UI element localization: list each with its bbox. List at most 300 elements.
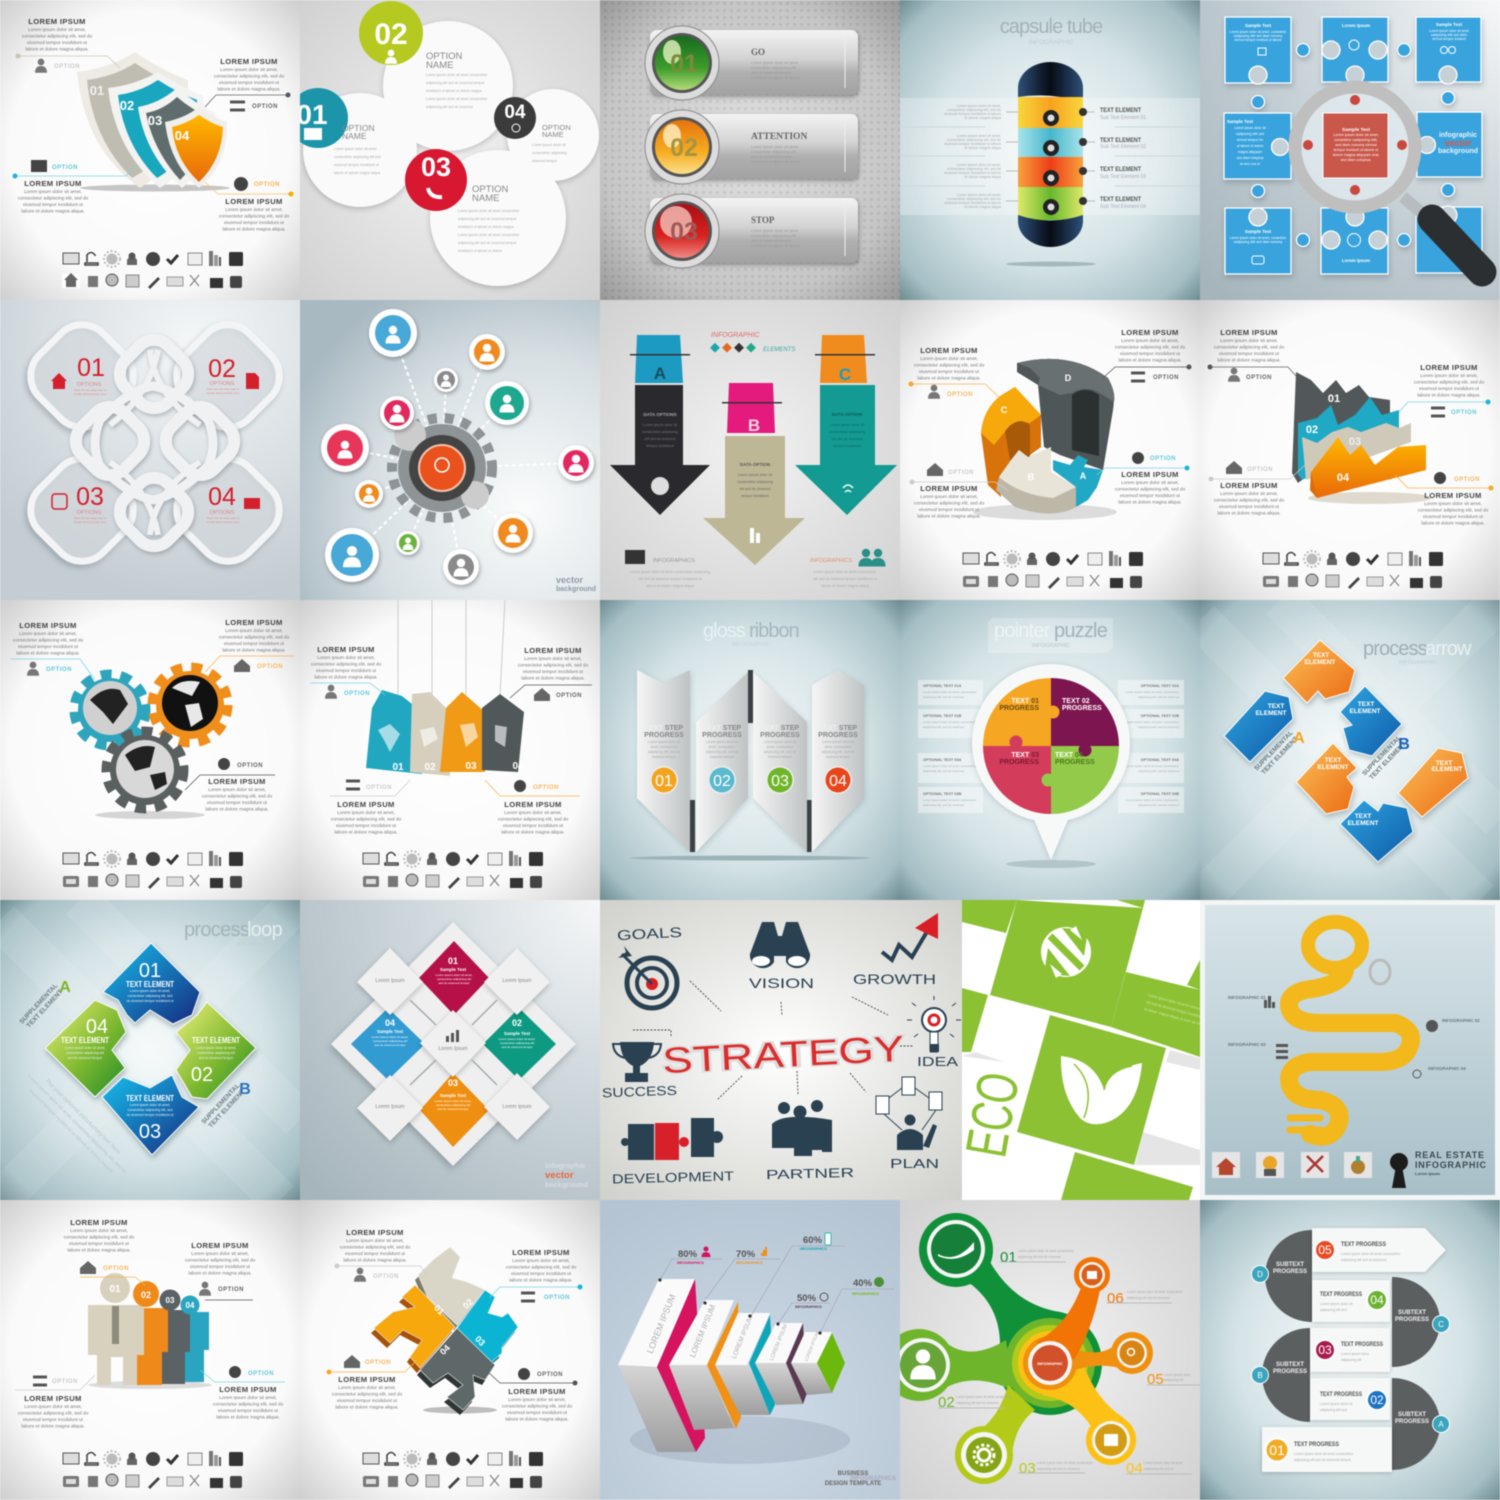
loop text: 03 xyxy=(139,1121,161,1143)
number badges: 03 xyxy=(1318,1343,1332,1357)
leader lines and percents: 80% xyxy=(678,1249,698,1260)
capsule labels: eiusmod tempor incididunt ut labore xyxy=(944,201,1001,205)
piece captions: Lorem ipsum dolor sit amet, consetetur xyxy=(1230,236,1287,240)
step paragraph: eiusmod tempor xyxy=(826,755,851,759)
step paragraph: adipiscing elit, sed do xyxy=(764,750,796,754)
option name labels: NAME xyxy=(342,131,367,141)
lorem text block 1: labore et dolore magna aliqua. xyxy=(1118,358,1182,362)
lorem text block 3: labore et dolore magna aliqua. xyxy=(205,806,269,812)
small white diamonds xyxy=(357,948,550,1141)
capsule labels: consectetur adipiscing elit, sed do xyxy=(947,138,1001,142)
panel: gloss ribbon xyxy=(599,599,901,901)
pointer xyxy=(972,664,1130,860)
supplemental labels: A xyxy=(1293,730,1305,747)
step paragraph: eiusmod tempor xyxy=(652,755,677,759)
lorem text block 2: labore et dolore magna aliqua. xyxy=(509,1278,573,1282)
arrow B: elit sed do eiusmod xyxy=(740,487,770,491)
piece captions: Sample Text xyxy=(1227,119,1254,124)
lorem text block 1: LOREM IPSUM xyxy=(19,621,77,630)
block captions: LOREM IPSUM xyxy=(731,1315,754,1360)
bar STOP xyxy=(645,194,858,268)
arrow A xyxy=(610,335,710,515)
piece numbers xyxy=(432,1297,487,1357)
supplemental labels: TEXT ELEMENT xyxy=(1368,741,1408,781)
piece captions: Lorem ipsum dolor sit amet, consetetur xyxy=(1230,30,1287,34)
block captions: LOREM IPSUM xyxy=(769,1323,789,1362)
development: DEVELOPMENT xyxy=(612,1168,734,1187)
side text bands: Lorem ipsum dolor sit amet, consectetur xyxy=(923,690,976,694)
body text xyxy=(1294,1252,1401,1462)
diamond labels: 04 xyxy=(385,1018,395,1028)
lorem text block 4: eiusmod tempor incididunt ut xyxy=(224,220,285,225)
subtext labels: SUBTEXT xyxy=(1398,1412,1426,1418)
lorem text block 4: consectetur adipiscing elit, sed do xyxy=(213,1402,284,1406)
diamond labels: 03 xyxy=(448,1078,458,1088)
body text: adipiscing elit sed do eiusmod tempor xyxy=(1294,1458,1352,1462)
numbers and captions: adipiscing elit sed do eiusmod xyxy=(956,1401,999,1405)
arrow C xyxy=(795,335,897,515)
title xyxy=(1363,638,1472,666)
lorem text block 4: Lorem ipsum dolor sit amet, xyxy=(1424,501,1482,506)
idea: IDEA xyxy=(917,1054,958,1069)
lorem text block 1: LOREM IPSUM xyxy=(70,1218,128,1227)
lorem text block 4: labore et dolore magna aliqua. xyxy=(216,1414,280,1420)
lorem text block 2: consectetur adipiscing elit, sed do xyxy=(518,662,589,668)
lorem text block 3 xyxy=(18,179,89,214)
paragraph text: Lorem ipsum dolor sit amet consectetur xyxy=(426,97,488,101)
text labels: TEXT PROGRESS xyxy=(1341,1342,1383,1348)
lorem text block 3: labore et dolore magna aliqua. xyxy=(335,1404,399,1410)
piece captions: Sample Text xyxy=(1436,22,1463,27)
leader lines and percents: 50% xyxy=(797,1293,817,1304)
arrow A: elit sed do eiusmod xyxy=(645,437,675,441)
lorem text block 2: labore et dolore magna aliqua. xyxy=(217,86,281,92)
step paragraph: Lorem ipsum dolor sit xyxy=(706,740,738,744)
capsule labels: TEXT ELEMENT xyxy=(1100,196,1141,203)
subtext labels xyxy=(1273,1262,1429,1425)
option labels: OPTION xyxy=(1247,467,1273,473)
arrow captions: TEXT xyxy=(1268,703,1284,710)
supplemental labels: SUPPLEMENTAL xyxy=(18,982,59,1026)
capsule labels: TEXT ELEMENT xyxy=(1100,166,1141,173)
lorem text block 4: consectetur adipiscing elit, sed do xyxy=(219,214,290,218)
paragraph text: Lorem ipsum dolor sit xyxy=(532,143,565,147)
tile paragraphs: Lorem ipsum dolor sit amet, xyxy=(130,1103,170,1107)
footer captions: elit sed do eiusmod tempor incididunt ut xyxy=(813,577,877,581)
lorem text block 3: eiusmod tempor incididunt ut xyxy=(337,1398,398,1403)
lorem text block 4: LOREM IPSUM xyxy=(225,197,283,206)
lorem text block 2: consectetur adipiscing elit, sed do xyxy=(914,362,985,368)
pie puzzle: TEXT 01 xyxy=(1011,698,1039,705)
leader lines and percents: 60% xyxy=(803,1235,823,1246)
lorem ipsum corners: Lorem Ipsum xyxy=(375,978,405,984)
footer captions: elit sed do eiusmod tempor incididunt ut xyxy=(638,577,702,581)
lorem text block 4: Lorem ipsum dolor sit amet, xyxy=(225,207,283,212)
lorem text block 3: Lorem ipsum dolor sit amet, xyxy=(24,189,82,194)
partner: PARTNER xyxy=(766,1165,854,1182)
option labels: OPTION xyxy=(1246,375,1272,381)
side text bands: OPTIONAL TEXT 03A xyxy=(923,758,962,762)
step paragraph: Lorem ipsum dolor sit xyxy=(822,740,854,744)
orange gear xyxy=(152,667,228,743)
numbered heads: 01 xyxy=(109,1284,121,1295)
numbers and captions xyxy=(938,1249,1200,1477)
title xyxy=(703,620,799,648)
title: puzzle xyxy=(1054,620,1108,642)
text labels xyxy=(1294,1242,1386,1448)
infographic labels: INFOGRAPHIC 02 xyxy=(1442,1018,1480,1023)
footer captions: Lorem ipsum dolor sit amet consectetur adipiscing xyxy=(630,570,710,574)
subtext labels: PROGRESS xyxy=(1273,1369,1307,1375)
option labels: OPTION xyxy=(365,1360,391,1366)
panel: real estate key xyxy=(1200,900,1500,1200)
badge 04: 04 xyxy=(504,102,526,123)
panel: process loop xyxy=(0,899,301,1201)
step labels: PROGRESS xyxy=(818,732,858,739)
option labels: OPTION xyxy=(103,1266,129,1272)
side text bands: OPTIONAL TEXT 04B xyxy=(1141,792,1179,796)
numbers and captions: adipiscing elit sed do eiusmod xyxy=(1127,1296,1170,1300)
cylinder puzzle pieces xyxy=(981,359,1114,514)
heading: INFOGRAPHIC xyxy=(1415,1160,1487,1170)
options captions: OPTIONS xyxy=(210,381,235,387)
title: INFOGRAPHIC xyxy=(237,942,275,948)
lorem text block 1: eiusmod tempor incididunt ut xyxy=(27,40,88,45)
option labels: OPTION xyxy=(1451,410,1477,416)
diamond paragraphs: Lorem ipsum dolor sit amet, xyxy=(434,1099,472,1103)
option labels: OPTION xyxy=(947,392,973,398)
paragraph text: adipiscing elit sed do eiusmod tempor xyxy=(458,217,517,221)
lorem text block 2: labore et dolore magna aliqua. xyxy=(1417,392,1481,398)
tags xyxy=(366,690,524,776)
lorem text block 2: eiusmod tempor incididunt ut xyxy=(190,1264,251,1269)
body text: Lorem ipsum dolor sit amet consectetur xyxy=(1294,1452,1354,1456)
arrow B: Lorem ipsum dolor sit xyxy=(738,473,772,477)
text labels: TEXT PROGRESS xyxy=(1320,1292,1362,1298)
area layers: 01 xyxy=(1328,393,1340,405)
arrow captions: ELEMENT xyxy=(1431,766,1463,773)
number badges: 04 xyxy=(1370,1293,1384,1307)
panel: capsule tube xyxy=(899,0,1201,301)
lorem text block 3: eiusmod tempor incididunt ut xyxy=(1219,504,1280,509)
development xyxy=(612,1118,734,1187)
blue puzzle pieces xyxy=(1224,17,1482,274)
watermark: background xyxy=(545,1180,588,1189)
central gears xyxy=(392,418,492,518)
letter badges xyxy=(1252,1266,1450,1432)
arrow C: consectetur adipiscing xyxy=(829,430,865,434)
lorem text block 2: LOREM IPSUM xyxy=(512,1248,570,1257)
lorem text block 4: eiusmod tempor incididunt ut xyxy=(1120,493,1181,498)
lorem text block 2 xyxy=(1414,363,1485,398)
piece captions: Lorem Ipsum xyxy=(1342,258,1370,263)
text labels: TEXT PROGRESS xyxy=(1294,1442,1339,1448)
lorem text block 1: consectetur adipiscing elit, sed do xyxy=(1214,344,1285,350)
supplemental labels: SUPPLEMENTAL xyxy=(200,1082,241,1126)
lorem text block 2: consectetur adipiscing elit, sed do xyxy=(219,634,290,640)
tile paragraphs: do eiusmod tempor incididunt ut xyxy=(127,1113,173,1117)
small white icons xyxy=(1252,40,1456,264)
panel: puzzle magnifier xyxy=(1200,0,1500,300)
panel: strategy mind map xyxy=(600,900,962,1200)
lorem text block 2: labore et dolore magna aliqua. xyxy=(188,1270,252,1276)
step paragraph: Lorem ipsum dolor sit xyxy=(648,740,680,744)
infographic labels: INFOGRAPHIC 03 xyxy=(1228,1042,1266,1047)
body text: adipiscing elit sed xyxy=(1320,1308,1347,1312)
step paragraph: amet, consectetur xyxy=(651,745,678,749)
loop text xyxy=(61,960,241,1143)
lorem text block 1: consectetur adipiscing elit, sed do xyxy=(22,34,93,38)
watermark: infographic xyxy=(545,1161,586,1170)
body text: adipiscing elit sed do eiusmod xyxy=(1341,1258,1386,1262)
numbered heads: 04 xyxy=(186,1301,195,1310)
step paragraph: amet, consectetur xyxy=(825,745,852,749)
paragraph text: eiusmod tempor incididunt ut xyxy=(334,163,379,167)
person nodes xyxy=(321,309,594,585)
area layers xyxy=(1292,372,1426,498)
panel: diamond grid xyxy=(300,900,600,1200)
panel: shield infographic xyxy=(0,0,300,300)
options captions: OPTIONS xyxy=(77,510,102,516)
title: loop xyxy=(247,919,283,941)
subtext labels: SUBTEXT xyxy=(1398,1310,1426,1316)
lorem text block 3: eiusmod tempor incididunt ut xyxy=(207,800,268,805)
capsule labels: et dolore magna aliqua xyxy=(964,116,1001,120)
arrow A: consectetur adipiscing xyxy=(642,430,678,434)
capsule labels: eiusmod tempor incididunt ut labore xyxy=(944,142,1001,146)
arrow C: elit sed do eiusmod xyxy=(832,437,862,441)
lorem ipsum corners: Lorem Ipsum xyxy=(502,978,532,984)
diamond labels: 02 xyxy=(512,1018,522,1028)
lorem text block 3: LOREM IPSUM xyxy=(1220,481,1278,490)
title: process xyxy=(1363,638,1428,660)
pie puzzle: PROGRESS xyxy=(1062,705,1102,712)
loop text: TEXT ELEMENT xyxy=(61,1035,110,1045)
lorem text block 4: labore et dolore magna aliqua. xyxy=(1421,520,1485,526)
capsule labels: Sub Text Element 01 xyxy=(1100,115,1146,121)
lorem text block 1: labore et dolore magna aliqua. xyxy=(343,1258,407,1262)
supplemental labels xyxy=(18,979,251,1129)
numbers and captions: Lorem ipsum dolor xyxy=(1164,1373,1191,1377)
piece captions: sadipscing elitr sed diam xyxy=(1431,33,1467,37)
side text bands: adipiscing elit, sed do eiusmod xyxy=(1138,695,1179,699)
lorem text block 2: eiusmod tempor incididunt ut xyxy=(919,369,980,374)
infographic vector wordmark: vector xyxy=(1444,138,1472,148)
lorem text block 3 xyxy=(332,1375,403,1410)
footer title xyxy=(825,1471,896,1487)
magnifier: dolore magna aliquyam erat, xyxy=(1333,153,1379,157)
shields: 02 xyxy=(120,98,134,113)
supplemental labels: A xyxy=(59,979,71,996)
options captions: Here are an easy way to xyxy=(74,388,107,392)
block captions: LOREM IPSUM xyxy=(803,1331,820,1362)
tile paragraphs: Lorem ipsum dolor sit amet, xyxy=(65,1046,105,1050)
diamond labels: Sample Text xyxy=(440,1093,467,1098)
lorem text block 3: labore et dolore magna aliqua. xyxy=(1217,510,1281,516)
lorem text block 2: consectetur adipiscing elit, sed do xyxy=(1414,380,1485,384)
lorem text block 4: Lorem ipsum dolor sit amet, xyxy=(504,810,562,815)
loop text: TEXT ELEMENT xyxy=(192,1035,241,1045)
tile paragraphs: sed do eiusmod tempor xyxy=(68,1056,103,1060)
step numbers: 03 xyxy=(771,773,789,790)
option labels and connectors: OPTION xyxy=(52,165,78,171)
bar STOP: Lorem ipsum dolor sit amet, xyxy=(751,228,799,233)
step labels: PROGRESS xyxy=(644,732,684,739)
magnifier: tempor invidunt ut labore et xyxy=(1334,148,1378,152)
lorem text block 1: LOREM IPSUM xyxy=(1121,328,1179,337)
tags: 02 xyxy=(424,762,436,773)
strings xyxy=(398,600,505,695)
supplemental labels xyxy=(1253,730,1410,781)
capsule labels: Sub Text Element 02 xyxy=(1100,144,1146,150)
small text: et dolore magna aliqua ut enim ad minim xyxy=(1144,1007,1206,1027)
green tiles xyxy=(962,900,1200,1200)
pie puzzle: TEXT 03 xyxy=(1011,752,1039,759)
figures xyxy=(88,1305,209,1385)
capsule labels: TEXT ELEMENT xyxy=(1100,137,1141,144)
capsule labels: et dolore magna aliqua xyxy=(964,146,1001,150)
option labels: OPTION xyxy=(556,693,582,699)
piece captions: magna aliquyam xyxy=(1238,150,1262,154)
letter badges: D xyxy=(1257,1270,1263,1279)
title: process xyxy=(184,919,250,941)
numbers: 03 xyxy=(76,483,104,511)
arrow C: C xyxy=(839,365,851,384)
plan: PLAN xyxy=(890,1156,939,1171)
numbers and captions: Lorem ipsum dolor sit amet consectetur xyxy=(1127,1290,1184,1294)
diamond labels xyxy=(377,956,531,1098)
white bars xyxy=(1262,1228,1446,1472)
capsule labels: eiusmod tempor incididunt ut labore xyxy=(944,112,1001,116)
arrow captions: TEXT xyxy=(1313,652,1329,659)
bar ATTENTION: incididunt ut labore et dolore xyxy=(751,159,800,164)
title xyxy=(988,618,1113,653)
numbers: 02 xyxy=(208,355,236,383)
magnifier: sed diam voluptua. xyxy=(1341,158,1371,162)
panel: process arrow xyxy=(1199,599,1500,901)
panel: 3D area chart xyxy=(1200,300,1500,600)
lorem text block 4: labore et dolore magna aliqua. xyxy=(505,1416,569,1422)
numbers and captions: 06 xyxy=(1107,1290,1124,1307)
step paragraph: amet, consectetur xyxy=(767,745,794,749)
option labels: OPTION xyxy=(218,1287,244,1293)
option labels xyxy=(326,1264,582,1386)
lorem text block 1: labore et dolore magna aliqua. xyxy=(16,650,80,656)
shields xyxy=(77,52,227,188)
badge 02: 02 xyxy=(374,18,408,51)
options captions: Here are an easy way to xyxy=(207,387,240,391)
step labels xyxy=(644,725,858,739)
option labels: OPTION xyxy=(537,1372,563,1378)
side text bands: adipiscing elit, sed do eiusmod xyxy=(923,769,964,773)
magnifier: sed diam nonumy eirmod xyxy=(1335,143,1377,147)
diamond paragraphs: sed do eiusmod tempor xyxy=(374,1043,406,1047)
infographic labels: INFOGRAPHIC 04 xyxy=(1428,1066,1466,1071)
numbers xyxy=(76,354,236,511)
step numbers: 01 xyxy=(655,773,673,790)
capsule labels xyxy=(944,104,1146,210)
outer rings xyxy=(18,312,292,574)
panel: semicircle progress xyxy=(1199,1199,1500,1500)
subtext labels: SUBTEXT xyxy=(1276,1362,1304,1368)
panel: metal buttons xyxy=(599,0,901,301)
intro note: eiusmod tempor incididunt ut labore et dolore magna xyxy=(27,1088,114,1175)
panel: people figures xyxy=(0,1200,300,1500)
paragraph text: incididunt ut labore et dolore magna xyxy=(426,89,482,93)
icon rows xyxy=(1263,551,1443,589)
info captions: INFOGRAPHICS xyxy=(852,1292,880,1296)
infographic labels xyxy=(1228,995,1480,1071)
capsule labels: consectetur adipiscing elit, sed do xyxy=(947,167,1001,171)
lorem text block 1: consectetur adipiscing elit, sed do xyxy=(311,662,382,666)
panel: 3D stairs xyxy=(600,1200,900,1500)
capsule labels: eiusmod tempor incididunt ut labore xyxy=(944,171,1001,175)
loop text: 01 xyxy=(139,960,161,982)
option labels: OPTION xyxy=(533,785,559,791)
puzzle pieces xyxy=(374,1247,518,1410)
lorem text block 1: consectetur adipiscing elit, sed do xyxy=(64,1234,135,1240)
bar STOP: incididunt ut labore et dolore xyxy=(751,243,800,248)
lorem text block 4 xyxy=(1115,470,1186,504)
option labels: OPTION xyxy=(1150,456,1176,462)
diamond paragraphs: Lorem ipsum dolor sit amet, xyxy=(498,1037,536,1041)
small text xyxy=(1144,993,1224,1027)
cylinder puzzle pieces: C xyxy=(1001,405,1008,415)
small text: elit sed do eiusmod tempor incididunt ut labore xyxy=(1146,1000,1217,1023)
dark separators xyxy=(690,670,812,852)
lorem text block 4: consectetur adipiscing elit, sed do xyxy=(498,816,569,822)
intro note: Put your optional introductory text here xyxy=(44,1079,122,1156)
capsule labels: Sub Text Element 04 xyxy=(1100,204,1146,210)
lorem text block 4: eiusmod tempor incididunt ut xyxy=(1423,514,1484,519)
info captions: INFOGRAPHICS xyxy=(800,1247,828,1251)
puzzle extrusions xyxy=(371,1252,515,1415)
block captions: LOREM IPSUM xyxy=(645,1293,678,1355)
tile shadows xyxy=(962,1050,1200,1165)
footer captions: labore et dolore magna aliqua xyxy=(821,584,869,588)
heading: REAL ESTATE xyxy=(1415,1150,1485,1160)
option labels: OPTION xyxy=(248,1371,274,1377)
numbered heads xyxy=(100,1273,200,1314)
pie puzzle xyxy=(983,678,1119,814)
partner xyxy=(766,1100,854,1182)
magnifier: Lorem ipsum dolor sit amet, xyxy=(1333,133,1379,137)
lorem text block 1: consectetur adipiscing elit, sed do xyxy=(1115,344,1186,350)
arrow A: DATA OPTIONS xyxy=(643,412,677,417)
leader lines and percents xyxy=(658,1233,895,1335)
option labels and connectors: OPTION xyxy=(252,104,278,110)
piece captions: sadipscing elitr sed xyxy=(1236,132,1264,136)
paragraph text: Lorem ipsum dolor sit amet consectetur xyxy=(458,233,520,237)
lorem text block 1: LOREM IPSUM xyxy=(1220,328,1278,337)
lorem text block 1: labore et dolore magna aliqua. xyxy=(25,46,89,52)
option labels: OPTION xyxy=(46,667,72,673)
subtext labels: PROGRESS xyxy=(1395,1317,1429,1323)
badge 03: 03 xyxy=(421,152,451,182)
side text bands: Lorem ipsum dolor sit amet, consectetur xyxy=(1126,720,1179,724)
step labels: TEXT STEP xyxy=(761,725,799,732)
infographic vector wordmark xyxy=(1438,132,1478,155)
piece captions: Lorem Ipsum xyxy=(1342,23,1370,28)
lorem text block 3: labore et dolore magna aliqua. xyxy=(21,1424,85,1428)
lorem text block 1: eiusmod tempor incididunt ut xyxy=(345,1251,406,1256)
option name labels: OPTION xyxy=(472,184,509,195)
info captions: INFOGRAPHICS xyxy=(795,1305,822,1309)
piece numbers: 04 xyxy=(438,1343,452,1357)
dashed links xyxy=(345,333,576,567)
lorem text block 2 xyxy=(518,646,589,680)
arrow C: DATA OPTION xyxy=(832,412,862,417)
